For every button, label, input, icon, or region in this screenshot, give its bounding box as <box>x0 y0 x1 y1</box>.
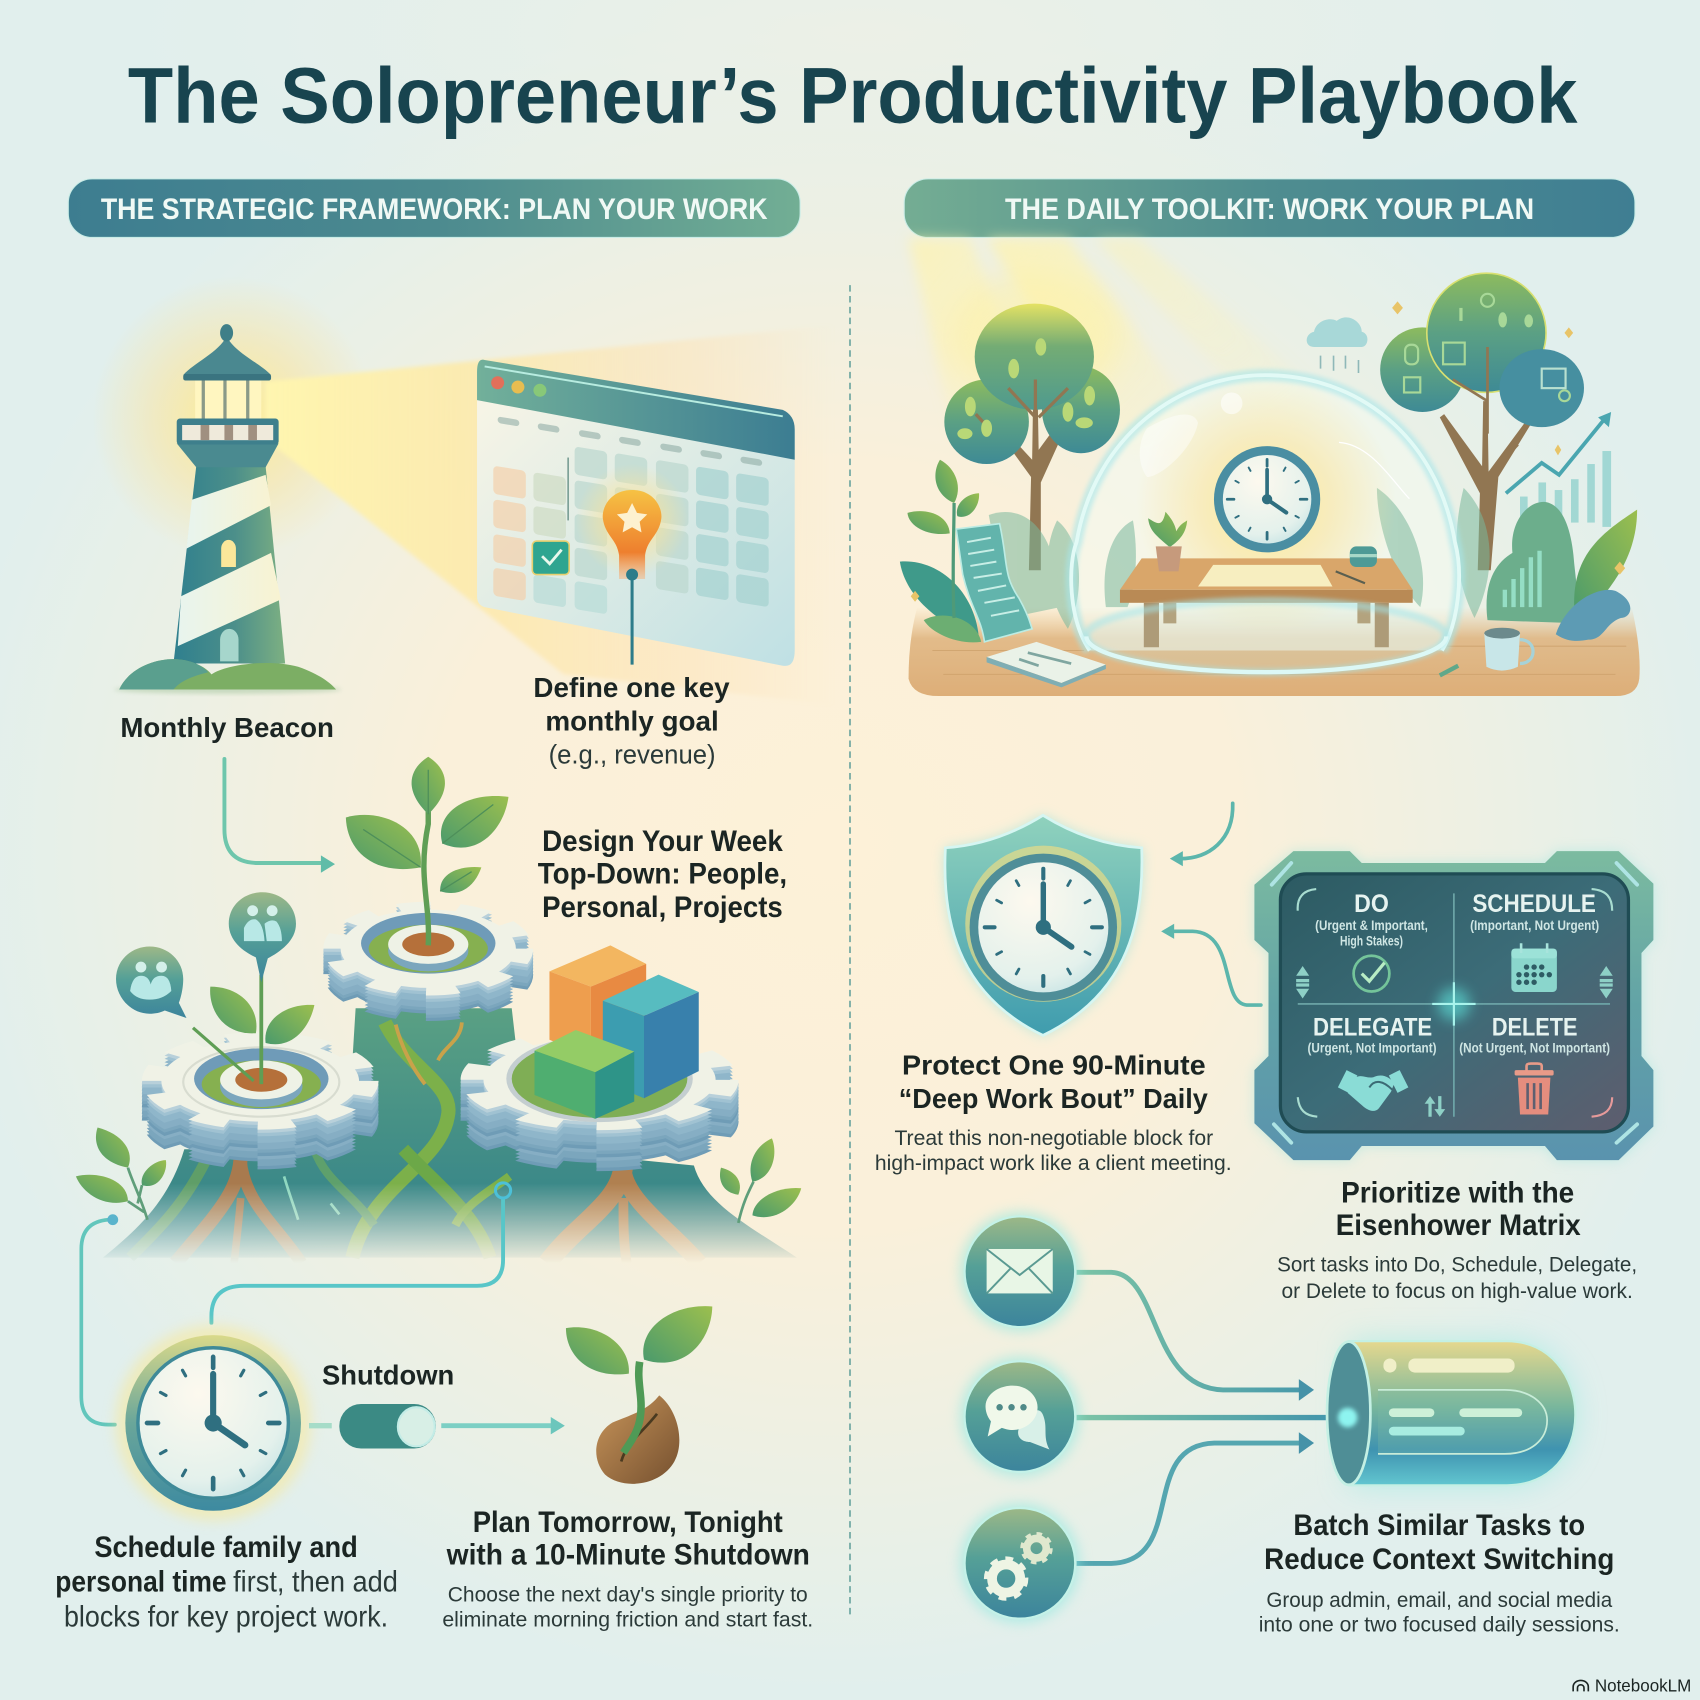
text: design your week: Top-Down: People, <box>538 859 787 891</box>
quadrant: do: High Stakes) <box>1340 933 1403 948</box>
light beam <box>266 325 835 705</box>
icon: email disc <box>960 1212 1080 1331</box>
desk <box>1120 512 1413 647</box>
panel header: strategic framework: THE STRATEGIC FRAMEWORK: PLAN YOUR WORK <box>101 194 768 226</box>
connector: clock to gears <box>211 1183 511 1323</box>
text: batch similar tasks: into one or two focused daily sessions. <box>1259 1612 1620 1637</box>
text: batch similar tasks: Reduce Context Switching <box>1264 1544 1614 1576</box>
arrow: beacon to week <box>224 759 335 873</box>
arrow: matrix to shield <box>1161 924 1261 1005</box>
left tree <box>944 271 1121 570</box>
project blocks <box>535 945 699 1119</box>
text: design your week <box>538 826 787 924</box>
text: plan tomorrow: eliminate morning friction and start fast. <box>442 1606 813 1631</box>
text: schedule family: Schedule family and <box>94 1532 358 1564</box>
icon: chat disc <box>960 1357 1080 1476</box>
text: design your week: Personal, Projects <box>542 892 783 924</box>
right plants with mini chart <box>1487 502 1637 641</box>
arrows: tasks flowing into batch <box>1077 1272 1344 1563</box>
quadrant: schedule: SCHEDULE <box>1472 890 1596 918</box>
text: prioritize with matrix: Prioritize with the <box>1341 1177 1574 1209</box>
panel header: strategic framework <box>68 179 800 237</box>
text: schedule family: personal time <box>55 1567 227 1599</box>
text: monthly goal <box>533 671 730 769</box>
right tree <box>1380 273 1584 570</box>
icon: gears disc <box>960 1504 1080 1623</box>
text: batch similar tasks <box>1259 1510 1620 1637</box>
growth chart <box>1506 412 1611 527</box>
text: plan tomorrow: with a 10-Minute Shutdown <box>446 1539 810 1571</box>
text: protect deep work: Treat this non-negotiable block for <box>894 1125 1213 1150</box>
text: schedule family: blocks for key project work. <box>64 1601 388 1633</box>
wall clock <box>1214 446 1320 552</box>
text: plan tomorrow: Choose the next day's single priority to <box>448 1581 808 1606</box>
quadrant: delete: (Not Urgent, Not Important) <box>1459 1041 1610 1056</box>
icon: shield clock <box>945 815 1142 1035</box>
goal pin <box>576 464 688 665</box>
side plants <box>76 1128 801 1223</box>
panel header: daily toolkit: THE DAILY TOOLKIT: WORK YOUR PLAN <box>1005 194 1534 226</box>
text: schedule family: first, then add <box>233 1567 398 1599</box>
text: batch similar tasks: Group admin, email, and social media <box>1266 1587 1613 1612</box>
sun rays <box>909 239 1344 455</box>
dome glow <box>1136 374 1396 634</box>
decorative sparkles <box>911 301 1625 602</box>
calendar window <box>477 360 795 666</box>
dome interior <box>1071 375 1459 651</box>
text: design your week: Design Your Week <box>542 826 783 858</box>
quadrant: do: DO <box>1354 890 1389 918</box>
icon: sprouting seed <box>566 1306 712 1484</box>
notebook <box>987 642 1106 687</box>
text: protect deep work: “Deep Work Bout” Daily <box>899 1082 1208 1114</box>
text: prioritize with matrix <box>1277 1177 1637 1303</box>
background foliage <box>989 488 1490 629</box>
illustration: deep work dome scene <box>900 239 1640 696</box>
title: The Solopreneur’s Productivity Playbook <box>128 51 1578 140</box>
text: monthly goal: (e.g., revenue) <box>549 738 716 769</box>
label: monthly beacon: Monthly Beacon <box>120 711 334 743</box>
coffee mug <box>1440 628 1533 675</box>
text: prioritize with matrix: Sort tasks into Do, Schedule, Delegate, <box>1277 1252 1637 1277</box>
icon: schedule clock <box>116 1325 311 1521</box>
top gear and sprout <box>334 757 522 1016</box>
quadrant: delegate <box>1308 1013 1437 1111</box>
icon: batch container <box>1327 1341 1575 1485</box>
quadrant: delete <box>1459 1013 1610 1115</box>
glass dome <box>1071 375 1459 672</box>
text: prioritize with matrix: or Delete to focus on high-value work. <box>1282 1278 1633 1303</box>
illustration: lighthouse beam and calendar <box>92 276 835 705</box>
quadrant: do <box>1315 890 1428 991</box>
label: shutdown: Shutdown <box>322 1359 454 1391</box>
left plant and scroll <box>900 460 1032 642</box>
cloud and rain <box>1307 317 1367 373</box>
roots and trunks <box>103 1008 797 1263</box>
ground <box>909 607 1640 696</box>
left gear and sprout <box>154 975 366 1164</box>
light glow <box>92 276 374 558</box>
panel: eisenhower matrix <box>1254 851 1653 1160</box>
text: protect deep work: Protect One 90-Minute <box>902 1048 1206 1080</box>
quadrant: do: (Urgent & Important, <box>1315 918 1428 933</box>
lighthouse <box>114 324 342 694</box>
text: plan tomorrow: Plan Tomorrow, Tonight <box>473 1507 783 1539</box>
panel header: daily toolkit <box>904 179 1635 237</box>
arrow: into shield from above <box>1170 803 1233 866</box>
illustration: gears, roots and plants <box>76 757 801 1263</box>
connector: clock to plants <box>81 1214 118 1425</box>
text: batch similar tasks: Batch Similar Tasks to <box>1293 1510 1585 1542</box>
text: plan tomorrow <box>442 1507 813 1631</box>
quadrant: delegate: (Urgent, Not Important) <box>1308 1041 1437 1056</box>
people bubble: top <box>229 892 296 982</box>
quadrant: schedule: (Important, Not Urgent) <box>1470 918 1599 933</box>
watermark: NotebookLM: NotebookLM <box>1595 1675 1691 1695</box>
text: prioritize with matrix: Eisenhower Matrix <box>1336 1210 1581 1242</box>
quadrant: delegate: DELEGATE <box>1313 1013 1432 1041</box>
quadrant: delete: DELETE <box>1492 1013 1577 1041</box>
small priority arrows <box>1296 966 1613 1117</box>
right gear <box>475 1035 724 1166</box>
text: schedule family <box>55 1532 398 1633</box>
text: protect deep work: high-impact work like a client meeting. <box>875 1150 1232 1175</box>
text: monthly goal: monthly goal <box>545 705 719 737</box>
text: monthly goal: Define one key <box>533 671 730 703</box>
quadrant: schedule <box>1470 890 1599 992</box>
text: protect deep work <box>875 1048 1232 1175</box>
icon: shutdown toggle and arrow <box>309 1404 565 1448</box>
people bubble: left <box>116 946 186 1018</box>
